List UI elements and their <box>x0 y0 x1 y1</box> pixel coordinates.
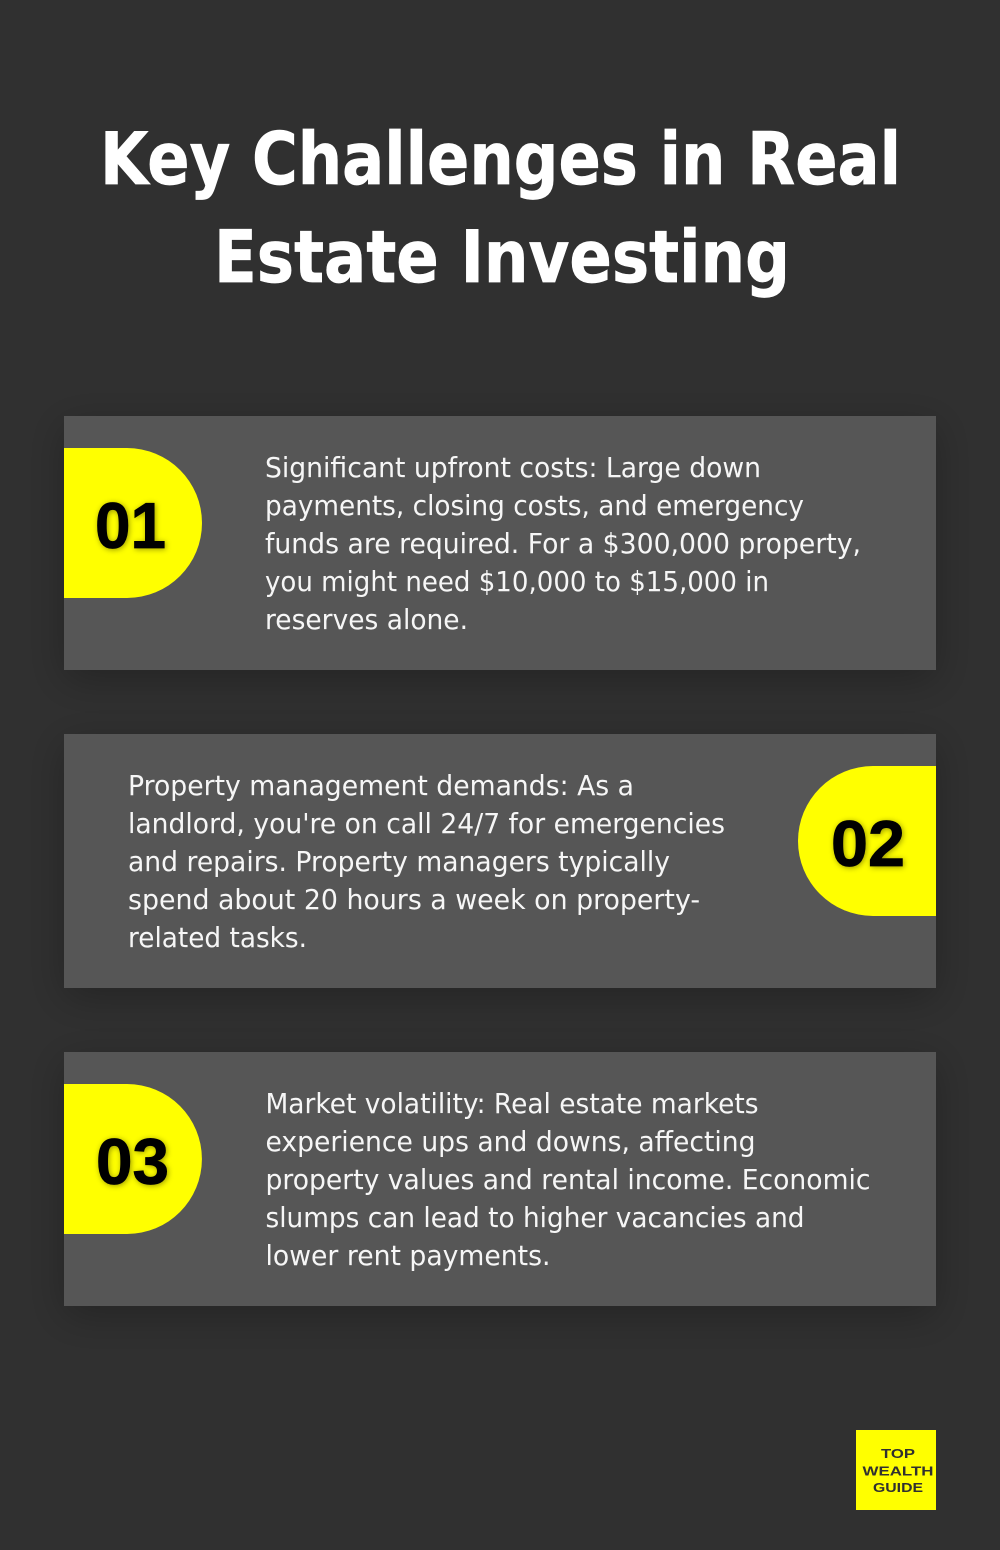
panel: challenge 03 <box>64 1052 936 1306</box>
text: market volatility: lower rent payments. <box>266 1240 550 1272</box>
logo: Top Wealth Guide <box>856 1430 936 1510</box>
text: property management: spend about 20 hours a week on property- <box>128 884 700 916</box>
text: upfront costs: payments, closing costs, and emergency <box>265 490 804 522</box>
badge: 03 <box>64 1084 202 1234</box>
panel: challenge 02 <box>64 734 936 988</box>
badge: 03: 03 <box>96 1125 169 1198</box>
text: property management: and repairs. Property managers typically <box>128 846 670 878</box>
text: property management: related tasks. <box>128 922 307 954</box>
title: Key Challenges in Real <box>100 117 901 201</box>
badge: 02: 02 <box>831 807 905 880</box>
title: Estate Investing <box>214 215 790 299</box>
text: upfront costs: you might need $10,000 to $15,000 in <box>265 566 769 598</box>
text: property management: landlord, you're on call 24/7 for emergencies <box>128 808 725 840</box>
text: property management <box>128 770 725 954</box>
text: upfront costs: reserves alone. <box>265 604 468 636</box>
text: market volatility: experience ups and downs, affecting <box>266 1126 756 1158</box>
badge: 01 <box>64 448 202 598</box>
logo: Top Wealth Guide: TOP <box>881 1447 915 1461</box>
text: upfront costs: Significant upfront costs: Large down <box>265 452 761 484</box>
badge: 01: 01 <box>95 489 166 562</box>
text: market volatility <box>266 1088 870 1272</box>
logo: Top Wealth Guide: GUIDE <box>873 1481 923 1495</box>
title <box>100 117 901 299</box>
text: market volatility: Market volatility: Real estate markets <box>266 1088 758 1120</box>
logo: Top Wealth Guide: WEALTH <box>862 1464 934 1478</box>
text: market volatility: slumps can lead to higher vacancies and <box>266 1202 804 1234</box>
text: upfront costs <box>265 452 861 636</box>
badge: 02 <box>798 766 936 916</box>
text: property management: Property management demands: As a <box>128 770 634 802</box>
text: market volatility: property values and rental income. Economic <box>266 1164 870 1196</box>
text: upfront costs: funds are required. For a $300,000 property, <box>265 528 861 560</box>
panel: challenge 01 <box>64 416 936 670</box>
